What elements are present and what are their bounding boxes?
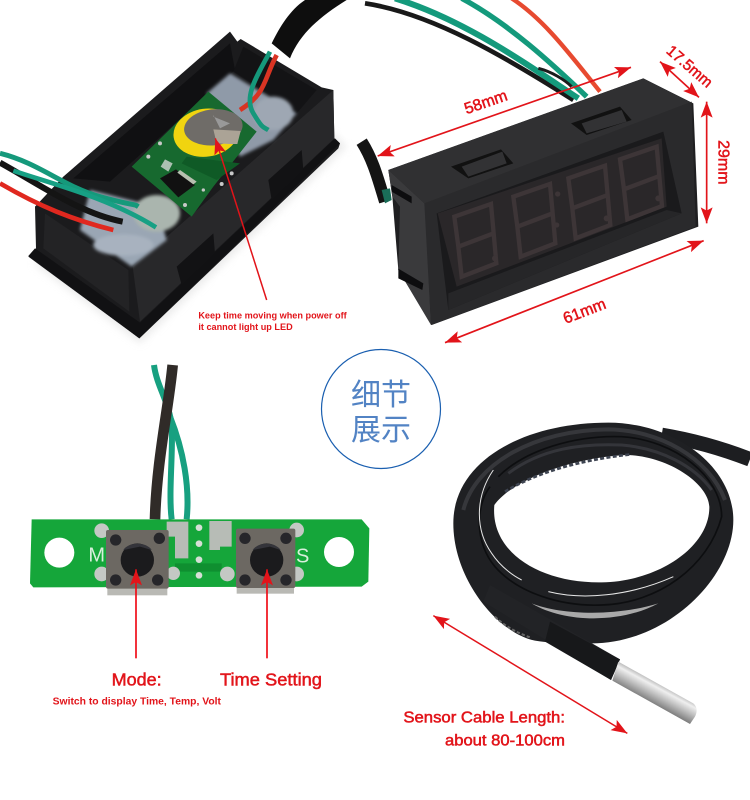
arrow: battery pointer xyxy=(215,138,267,300)
dimension: 61mm xyxy=(445,241,704,343)
open black case xyxy=(28,32,340,338)
badge: detail display circle xyxy=(322,350,440,468)
green circuit board xyxy=(132,92,257,217)
badge: detail display circle: 展示 xyxy=(351,405,411,449)
caption: battery note: Keep time moving when power off xyxy=(198,310,348,320)
panel: battery inside open case xyxy=(0,0,348,343)
badge: detail display circle: 细节 xyxy=(351,370,411,414)
caption: sensor cable length: Sensor Cable Length: xyxy=(403,710,565,727)
green PCB: S xyxy=(296,546,309,568)
dimension: 17.5mm: 17.5mm xyxy=(663,42,716,91)
caption: sensor cable length xyxy=(403,710,565,749)
top clips xyxy=(451,107,632,178)
caption: mode description: Switch to display Time, Temp, Volt xyxy=(53,696,222,707)
coin battery xyxy=(170,104,244,161)
dimension: 29mm xyxy=(707,102,732,223)
arrow: cable length xyxy=(433,616,627,733)
board wires xyxy=(154,365,188,519)
caption: battery note xyxy=(198,310,348,332)
wires and cable xyxy=(362,0,600,203)
meter body xyxy=(388,78,698,325)
arrow: time setting xyxy=(264,569,269,658)
green PCB: M xyxy=(88,545,105,567)
dimension: 58mm: 58mm xyxy=(462,88,510,118)
steel probe xyxy=(612,662,697,724)
arrow: mode xyxy=(133,569,138,658)
caption: sensor cable length: about 80-100cm xyxy=(445,732,565,749)
LED display xyxy=(438,138,667,287)
wires xyxy=(0,0,347,230)
panel: front view with dimensions xyxy=(362,0,732,343)
dimension: 61mm: 61mm xyxy=(561,296,609,328)
green PCB xyxy=(30,519,369,587)
dimension: 29mm: 29mm xyxy=(715,140,732,185)
coiled black cable xyxy=(453,423,750,644)
label: time setting: Time Setting xyxy=(220,669,322,689)
mode push button xyxy=(106,530,169,595)
glue and potting xyxy=(80,73,297,267)
heat-shrink sleeve xyxy=(483,585,620,680)
caption: battery note: it cannot light up LED xyxy=(198,322,293,332)
panel: temperature sensor cable xyxy=(403,423,750,749)
label: mode: Mode: xyxy=(112,669,162,689)
dimension: 58mm xyxy=(378,67,631,156)
panel: button board xyxy=(30,365,369,707)
time setting push button xyxy=(236,529,295,594)
